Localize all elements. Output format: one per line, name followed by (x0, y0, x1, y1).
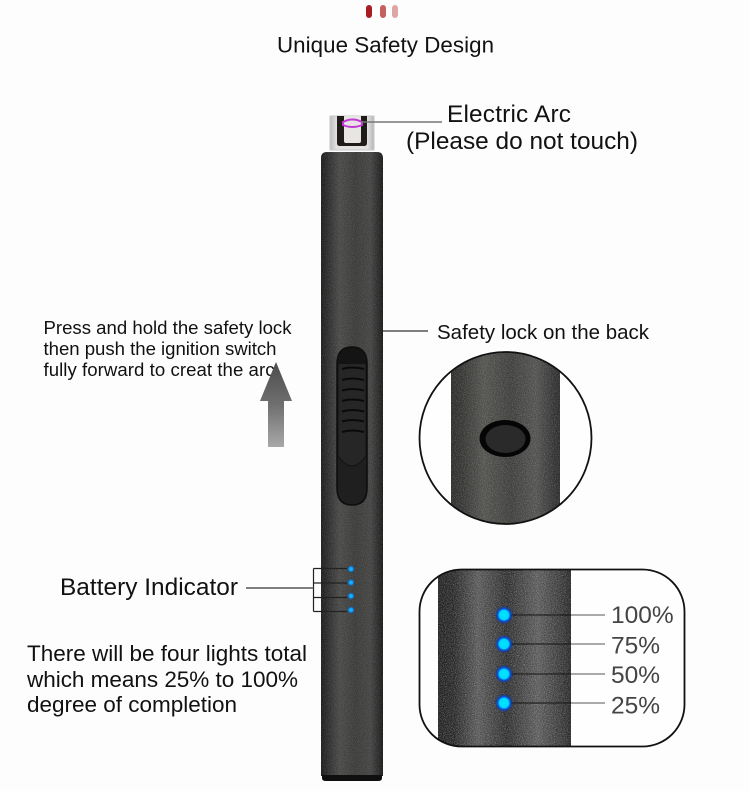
percentage labels (611, 602, 674, 720)
label: safety lock on the back: Safety lock on the back (437, 321, 650, 344)
percentage labels: 75% (611, 632, 660, 660)
circular callout: safety lock (420, 350, 592, 526)
safety lock button (480, 420, 530, 457)
rounded callout: battery levels (420, 569, 684, 747)
leader lines to percentages (504, 615, 571, 703)
safety lock leader line (383, 330, 428, 332)
magnified indicator lights (494, 606, 514, 712)
lighter head with electric arc (330, 116, 374, 150)
label: electric arc: Electric Arc (447, 101, 571, 128)
explanation text: four lights: which means 25% to 100% (26, 667, 298, 692)
arc leader line (362, 121, 442, 123)
explanation text: four lights: There will be four lights total (27, 641, 307, 666)
decorative three red dots (366, 5, 398, 18)
lighter body (321, 152, 383, 781)
title: Unique Safety Design (277, 32, 494, 58)
instruction text: safety lock: Press and hold the safety lock (44, 317, 292, 338)
explanation text: four lights: degree of completion (27, 692, 237, 717)
instruction text: safety lock: then push the ignition switch (44, 338, 276, 359)
four body indicator lights (347, 565, 355, 614)
ignition switch slider (337, 347, 367, 505)
lighter product (321, 116, 383, 781)
percentage labels: 50% (611, 662, 660, 689)
label: do not touch: (Please do not touch) (406, 128, 638, 155)
arrow: push upward (260, 362, 292, 447)
bracket lines to indicator lights (246, 568, 347, 612)
label: battery indicator: Battery Indicator (60, 574, 238, 601)
percentage labels: 25% (611, 692, 660, 720)
instruction text: safety lock: fully forward to creat the arc (44, 359, 274, 380)
percentage labels: 100% (611, 602, 674, 629)
